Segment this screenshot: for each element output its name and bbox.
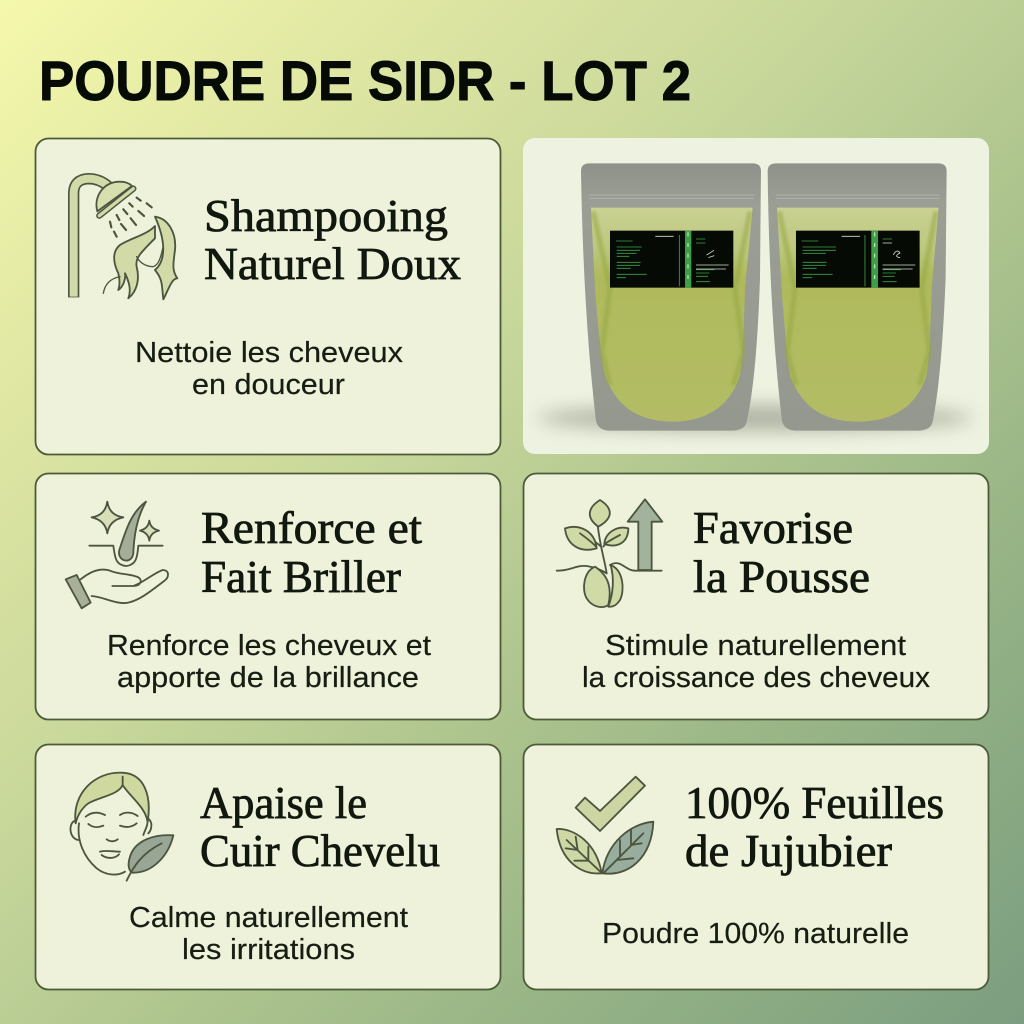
heading: Apaise le Cuir Chevelu: Cuir Chevelu (200, 825, 440, 876)
panel: renforce (36, 474, 500, 720)
text: description (129, 902, 408, 966)
icon: shower and hair (74, 179, 177, 299)
heading: Shampooing Naturel Doux (204, 190, 461, 289)
text: description: en douceur (192, 369, 345, 401)
heading: Apaise le Cuir Chevelu (200, 777, 440, 876)
heading: 100% Feuilles de Jujubier: de Jujubier (685, 825, 892, 876)
text: description (135, 337, 404, 401)
panel: apaise (36, 744, 500, 990)
heading: Renforce et Fait Briller (201, 502, 422, 602)
text: description (582, 630, 930, 694)
icon: sprout and arrow (557, 499, 662, 607)
heading: Renforce et Fait Briller: Renforce et (201, 502, 422, 553)
heading: Shampooing Naturel Doux: Shampooing (204, 190, 448, 241)
icon: check and leaves (557, 777, 653, 874)
panel: shampooing (36, 138, 500, 454)
heading: 100% Feuilles de Jujubier (685, 777, 944, 876)
title: POUDRE DE SIDR - LOT 2 (39, 49, 691, 112)
panel: product photo (523, 138, 989, 454)
pouch left (581, 163, 761, 431)
icon: face and leaf (70, 773, 173, 881)
text: description: apporte de la brillance (117, 662, 419, 694)
heading: Apaise le Cuir Chevelu: Apaise le (200, 777, 367, 828)
floor shadow (537, 405, 973, 431)
text: description: Poudre 100% naturelle (602, 918, 909, 950)
heading: Favorise la Pousse: la Pousse (693, 551, 870, 602)
text: description: Nettoie les cheveux (135, 337, 404, 369)
text: description: Calme naturellement (129, 902, 408, 934)
text: description: Renforce les cheveux et (107, 630, 431, 662)
text: description: la croissance des cheveux (582, 662, 930, 694)
heading: Favorise la Pousse: Favorise (693, 502, 853, 553)
pouch right (768, 163, 947, 431)
heading: Favorise la Pousse (693, 502, 870, 602)
icon: hair strand, sparkles and hand (66, 502, 168, 608)
heading: Shampooing Naturel Doux: Naturel Doux (204, 238, 461, 289)
text: description (107, 630, 431, 694)
heading: 100% Feuilles de Jujubier: 100% Feuilles (685, 777, 944, 828)
panel: pousse (524, 474, 988, 720)
panel: jujubier (524, 744, 988, 990)
heading: Renforce et Fait Briller: Fait Briller (201, 551, 401, 602)
text: description: les irritations (182, 934, 355, 966)
text: description: Stimule naturellement (605, 630, 906, 662)
